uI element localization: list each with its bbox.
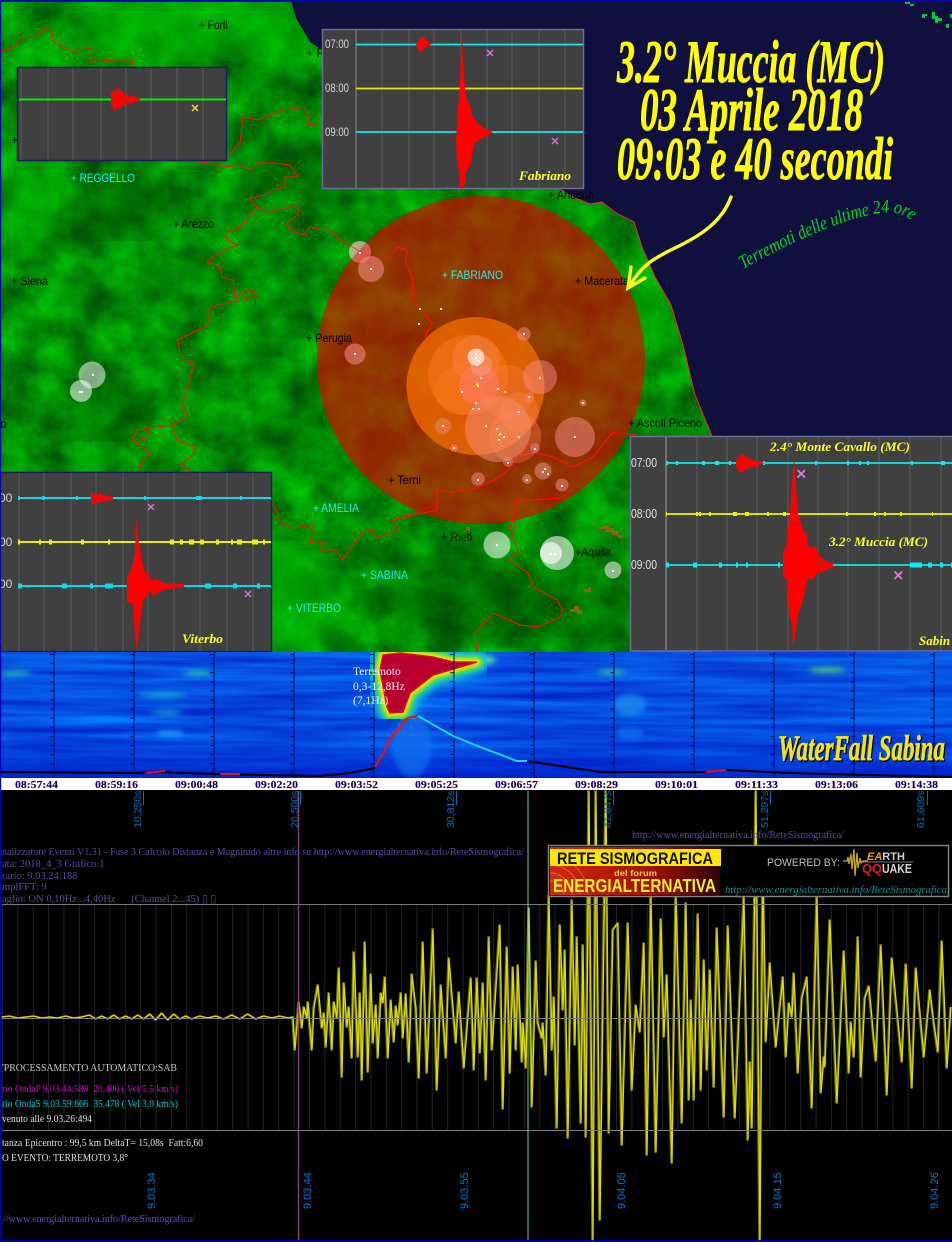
automatic processing results: rio OndaP 9.03.44:588 20,400 ( Vel 5,5 km/s) xyxy=(2,1084,178,1095)
markers xyxy=(487,50,558,144)
station labels: + REGGELLO xyxy=(71,171,135,185)
hour labels: 07:00 xyxy=(631,455,657,470)
automatic processing results xyxy=(2,1063,203,1164)
epicentre dots xyxy=(79,252,614,572)
seismogram elapsed-seconds labels xyxy=(132,791,928,828)
analyzer info text xyxy=(2,847,524,905)
city labels: + Forlì xyxy=(199,18,228,32)
panel: Fabriano xyxy=(322,30,584,188)
analyzer info text: aglio: ON 0,10Hz...4,40Hz (Channel 2...45) ▯ ▯ xyxy=(2,894,216,905)
analyzer info text: ata: 2018_4_3 Grafico:1 xyxy=(2,859,105,870)
earthquake logo: QQ xyxy=(862,861,882,876)
earthquake annotation: (7,1Hz) xyxy=(353,695,389,707)
waterfall time axis xyxy=(0,778,952,791)
hour labels xyxy=(0,491,13,591)
seismogram clock labels: 9.04.05 xyxy=(616,1172,628,1209)
marker xyxy=(192,105,198,111)
map panel: central Italy relief xyxy=(0,0,952,652)
city labels xyxy=(0,18,702,559)
traces xyxy=(356,44,583,132)
regional borders and coastline xyxy=(0,28,712,652)
earthquake energy blob xyxy=(380,653,477,713)
city labels: + Terni xyxy=(388,473,421,487)
traces xyxy=(18,498,271,586)
event labels: 3.2° Muccia (MC) xyxy=(828,534,928,549)
automatic processing results: venuto alle 9.03.26:494 xyxy=(2,1114,93,1125)
waterfall time axis: 08:59:16 xyxy=(95,779,139,791)
hour labels: 08:00 xyxy=(631,506,657,521)
top right islands xyxy=(905,2,952,28)
waterfall time axis: 09:11:33 xyxy=(735,779,779,791)
icon: seismic wave xyxy=(843,849,868,876)
waterfall spectrogram xyxy=(0,652,952,779)
orange magnitude circles xyxy=(344,241,595,492)
station labels: + AMELIA xyxy=(313,501,359,515)
automatic processing results: tanza Epicentro : 99,5 km DeltaT= 15,08s Fatt:6,60 xyxy=(2,1138,203,1149)
seismic burst xyxy=(111,87,140,112)
station labels: + FABRIANO xyxy=(442,268,503,282)
earthquake logo: EARTH xyxy=(867,851,905,863)
large felt-radius circle xyxy=(317,196,645,524)
hour labels: 09:00 xyxy=(325,125,349,139)
analyzer info text: rario: 9.03.24:188 xyxy=(2,871,78,882)
streak texture xyxy=(0,652,952,779)
city labels: + xyxy=(11,133,18,147)
time grid lines xyxy=(54,652,934,778)
station labels: + SABINA xyxy=(361,568,408,582)
banner: Rete Sismografica: del forum xyxy=(614,868,657,878)
city labels: + Ascoli Piceno xyxy=(628,416,702,430)
title xyxy=(616,29,893,192)
markers xyxy=(798,470,902,579)
S wave marker xyxy=(527,791,529,1240)
seismogram chart xyxy=(1,791,952,1240)
event labels: 2.4° Monte Cavallo (MC) xyxy=(769,439,910,454)
markers xyxy=(148,504,251,597)
seismogram clock labels: 9.04.15 xyxy=(772,1172,784,1209)
hour labels: 09:00 xyxy=(631,557,657,572)
distant earthquake circles on land xyxy=(70,241,622,578)
station labels xyxy=(71,171,503,615)
banner: Rete Sismografica: RETE SISMOGRAFICA xyxy=(557,849,713,868)
hour labels xyxy=(325,37,349,139)
seismogram clock labels: 9.03.55 xyxy=(459,1172,471,1209)
seismogram elapsed-seconds labels: 10,250s xyxy=(132,791,144,828)
waterfall time axis: 09:00:48 xyxy=(175,779,219,791)
waterfall time axis: 09:13:06 xyxy=(815,779,859,791)
hour labels: 07:00 xyxy=(325,37,349,51)
event labels: Sabin xyxy=(919,633,950,648)
city labels: + Rieti xyxy=(441,530,472,544)
seismogram elapsed-seconds labels: 41,047s xyxy=(602,791,614,828)
waterfall time axis: 09:08:29 xyxy=(575,779,619,791)
station name: Viterbo xyxy=(182,631,224,646)
seismogram clock labels xyxy=(146,1172,941,1209)
automatic processing results: O EVENTO: TERREMOTO 3,8° xyxy=(2,1153,128,1164)
waterfall time axis: 08:57:44 xyxy=(15,779,59,791)
grid xyxy=(2,904,952,1130)
seismogram elapsed-seconds labels: 20,500s xyxy=(289,791,301,828)
redrawn borders across felt circle xyxy=(328,229,613,530)
station labels: + VITERBO xyxy=(287,601,341,615)
seismogram clock labels: 9.04.26 xyxy=(929,1172,941,1209)
waterfall time axis: 09:03:52 xyxy=(335,779,379,791)
analyzer info text: nalizzatore Eventi V1.31 - Fase 3.Calcolo Distanza e Magnitudo altre info su http://www.energialternativa.info/ReteSismografica/ xyxy=(2,847,524,858)
waterfall time axis: 09:14:38 xyxy=(895,779,939,791)
seismic bursts xyxy=(91,491,184,652)
analyzer info text: mplFFT: 9 xyxy=(2,882,47,893)
banner link: http://www.energialternativa.info/ReteSismografica xyxy=(725,884,947,896)
city labels: + Perugia xyxy=(306,331,352,345)
yellow title band xyxy=(550,849,721,866)
city labels: + Ancona xyxy=(548,188,594,202)
seismogram elapsed-seconds labels: 61,609s xyxy=(915,791,927,828)
panel: unnamed station inset xyxy=(18,68,226,160)
top website link: http://www.energialternativa.info/ReteSismografica/ xyxy=(632,830,844,841)
seismogram clock labels: 9.03.44 xyxy=(302,1172,314,1209)
caption: last 24 hours: Terremoti delle ultime 24 ore xyxy=(738,200,916,268)
banner: Rete Sismografica xyxy=(548,844,950,898)
powered by: POWERED BY: xyxy=(767,857,840,869)
earthquake logo xyxy=(862,851,913,876)
bright spectral patches xyxy=(0,656,845,777)
waterfall time axis: 09:06:57 xyxy=(495,779,539,791)
earthquake annotation: Terremoto xyxy=(353,666,401,678)
high mountain patches xyxy=(466,525,623,614)
waterfall time axis: 09:02:20 xyxy=(255,779,299,791)
city labels: + Siena xyxy=(11,274,48,288)
energy curve xyxy=(0,716,952,777)
seismic bursts xyxy=(416,33,492,188)
bottom website link: //www.energialternativa.info/ReteSismografica/ xyxy=(3,1214,195,1225)
earthquake annotation xyxy=(353,666,405,707)
earthquake logo: UAKE xyxy=(882,861,912,876)
panel: Sabina xyxy=(630,436,952,651)
axis lines xyxy=(2,904,952,1130)
city labels: + Macerata xyxy=(575,274,629,288)
waterfall time axis: 09:10:01 xyxy=(655,779,698,791)
waterfall time axis: 09:05:25 xyxy=(415,779,459,791)
city labels: o xyxy=(0,417,7,431)
hour labels: 08:00 xyxy=(325,81,349,95)
waveform xyxy=(1,791,951,1240)
epicentre cross xyxy=(476,382,479,387)
banner: Rete Sismografica: ENERGIALTERNATIVA xyxy=(553,876,716,896)
seismic bursts xyxy=(736,453,833,647)
P wave marker xyxy=(298,791,300,1240)
red logo background xyxy=(550,847,720,895)
event labels xyxy=(769,439,950,648)
arrow to felt circle xyxy=(628,197,731,288)
seismogram elapsed-seconds labels: 51,297s xyxy=(759,791,771,828)
city labels: + R xyxy=(306,46,325,60)
seismogram elapsed-seconds labels: 30,812s xyxy=(445,791,457,828)
seismogram clock labels: 9.03.34 xyxy=(146,1172,158,1209)
earthquake annotation: 0,3-12,8Hz xyxy=(353,681,405,693)
automatic processing results: 'PROCESSAMENTO AUTOMATICO:SAB xyxy=(2,1063,177,1074)
trace xyxy=(19,98,226,100)
automatic processing results: rio OndaS 9.03.59:666 35,478 ( Vel 3,0 km/s) xyxy=(2,1099,178,1110)
city labels: +Aquila xyxy=(575,545,611,559)
hour labels xyxy=(631,455,657,572)
city labels: + Arezzo xyxy=(173,217,214,231)
traces xyxy=(666,463,952,565)
land relief xyxy=(0,0,760,652)
sea xyxy=(0,0,952,652)
panel: Viterbo xyxy=(0,472,272,652)
station name: Fabriano xyxy=(518,168,572,183)
